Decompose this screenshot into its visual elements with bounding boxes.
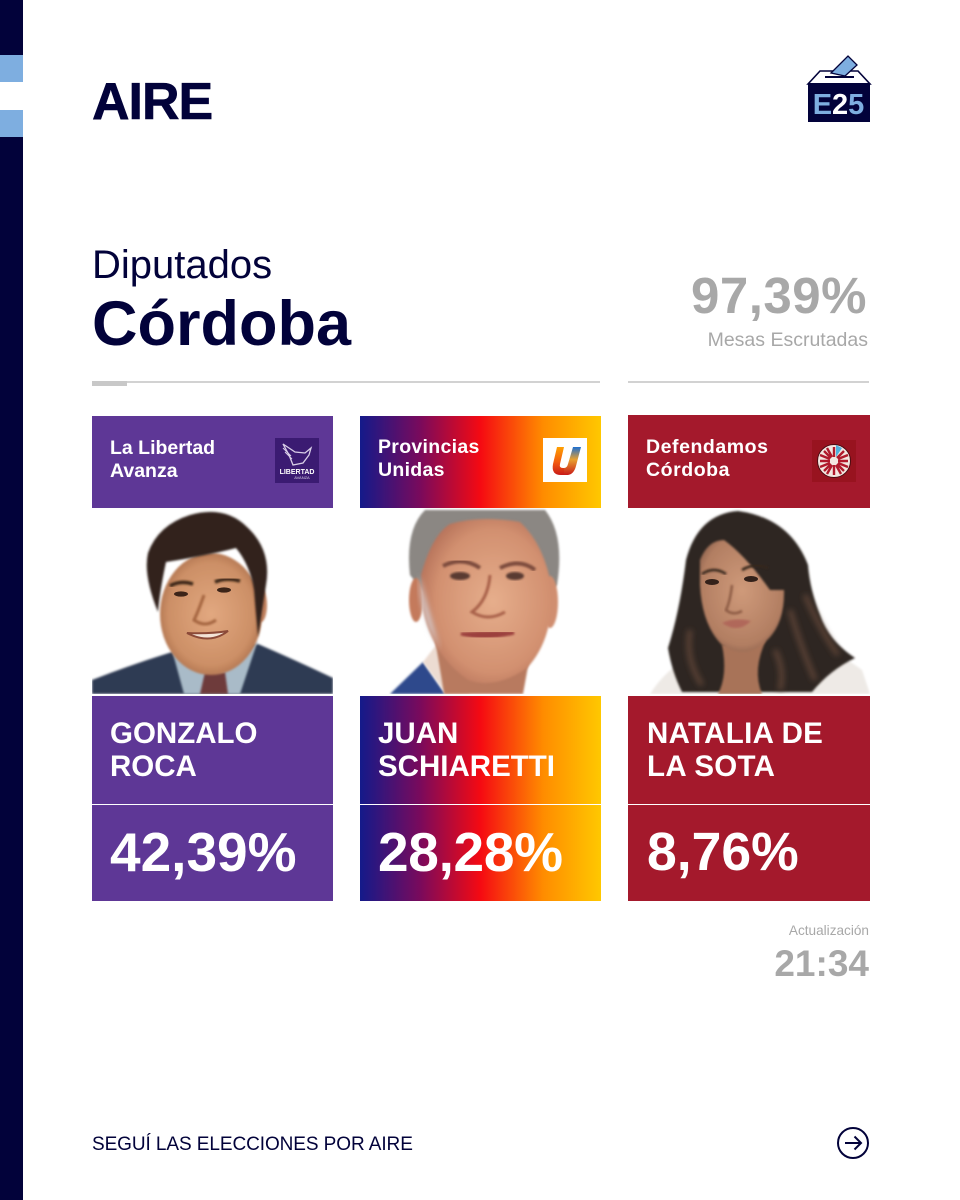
- candidate name: NATALIA DE: [647, 717, 823, 750]
- vote percentage: [360, 805, 601, 901]
- icon: party logo: LIBERTAD: [280, 469, 314, 476]
- party name: Provincias: [378, 436, 480, 458]
- icon: party logo: [543, 438, 587, 482]
- party name: [110, 437, 215, 482]
- party name: [646, 436, 769, 481]
- icon: party logo: [812, 440, 856, 482]
- vote percentage: [628, 805, 870, 901]
- stat label: Mesas Escrutadas: Mesas Escrutadas: [708, 329, 868, 351]
- party name: Avanza: [110, 460, 178, 482]
- party header: [360, 416, 601, 508]
- candidate name: LA SOTA: [647, 750, 775, 783]
- candidate name: ROCA: [110, 750, 197, 783]
- party name: Córdoba: [646, 459, 730, 481]
- panel: Provincias Unidas: [360, 416, 601, 901]
- stat: mesas escrutadas percentage: 97,39%: [691, 267, 867, 324]
- candidate name: JUAN: [378, 717, 458, 750]
- portrait: Gonzalo Roca: [92, 510, 333, 694]
- panel: Defendamos Córdoba: [628, 415, 870, 901]
- update label: Actualización: [789, 923, 869, 938]
- logo: AIRE: AIRE: [92, 73, 212, 131]
- panel: La Libertad Avanza: [92, 416, 333, 901]
- update time: 21:34: [774, 943, 869, 984]
- candidate name: [360, 696, 601, 804]
- portrait: Natalia De La Sota: [650, 509, 870, 694]
- icon: E25 ballot box: [806, 55, 872, 122]
- vote percentage: 8,76%: [647, 823, 799, 882]
- icon: E25 ballot box: E25: [813, 89, 864, 121]
- candidate name: [92, 696, 333, 804]
- candidate name: [628, 696, 870, 804]
- heading: Córdoba: Córdoba: [92, 289, 351, 359]
- party name: La Libertad: [110, 437, 215, 459]
- party header: [92, 416, 333, 508]
- portrait: Juan Schiaretti: [389, 508, 561, 694]
- icon: party logo: AVANZA: [294, 475, 310, 480]
- vote percentage: 42,39%: [110, 821, 297, 883]
- candidate name: SCHIARETTI: [378, 750, 555, 783]
- candidate name: GONZALO: [110, 717, 258, 750]
- vote percentage: 28,28%: [378, 821, 563, 883]
- sidebar: flag stripe: [0, 0, 23, 1200]
- party name: Unidas: [378, 459, 445, 481]
- party header: [628, 415, 870, 508]
- heading: Diputados: Diputados: [92, 243, 272, 287]
- vote percentage: [92, 805, 333, 901]
- party name: [378, 436, 480, 481]
- party name: Defendamos: [646, 436, 769, 458]
- footer text: SEGUÍ LAS ELECCIONES POR AIRE: [92, 1134, 413, 1155]
- icon: party logo: [275, 438, 319, 483]
- icon: arrow in circle: [837, 1127, 869, 1159]
